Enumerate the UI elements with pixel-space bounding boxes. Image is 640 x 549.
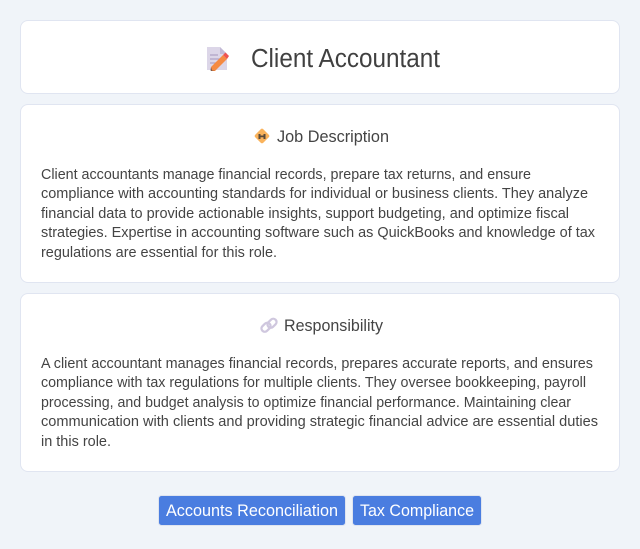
text block: responsibility	[41, 355, 598, 450]
title: Client Accountant	[251, 45, 440, 73]
icon: diamond sign	[254, 128, 270, 144]
text block: job description	[41, 166, 595, 261]
text block: job description: financial data to provide actionable insights, support budgeting, and optimize fiscal	[41, 205, 569, 222]
text block: responsibility: A client accountant manages financial records, prepares accurate reports, and ensures	[41, 355, 593, 372]
text block: responsibility: compliance with tax regulations for multiple clients. They oversee bookkeeping, payroll	[41, 374, 586, 391]
text block: responsibility: in this role.	[41, 433, 111, 450]
text block: job description: regulations are essential for this role.	[41, 244, 277, 261]
heading: responsibility: Responsibility	[284, 316, 383, 335]
panel: title card	[20, 20, 620, 94]
text block: responsibility: processing, and budget analysis to optimize financial performance. Maintaining clear	[41, 394, 571, 411]
text block: responsibility: communication with clients and providing strategic financial advice are essential duties	[41, 413, 598, 430]
text block: job description: strategies. Expertise in accounting software such as QuickBooks and knowledge of tax	[41, 224, 595, 241]
tag: accounts reconciliation: Accounts Reconciliation	[166, 502, 338, 520]
icon: chain link	[260, 317, 278, 333]
text block: job description: Client accountants manage financial records, prepare tax returns, and ensure	[41, 166, 531, 183]
panel: job description card	[20, 104, 620, 283]
panel: responsibility card	[20, 293, 620, 472]
heading: job description: Job Description	[277, 127, 389, 146]
tag: tax compliance	[352, 496, 482, 526]
icon: document with pencil	[207, 47, 229, 71]
tag: tax compliance: Tax Compliance	[360, 502, 474, 520]
tag: accounts reconciliation	[158, 496, 346, 526]
text block: job description: compliance with accounting standards for individual or business clients. They analyze	[41, 185, 588, 202]
